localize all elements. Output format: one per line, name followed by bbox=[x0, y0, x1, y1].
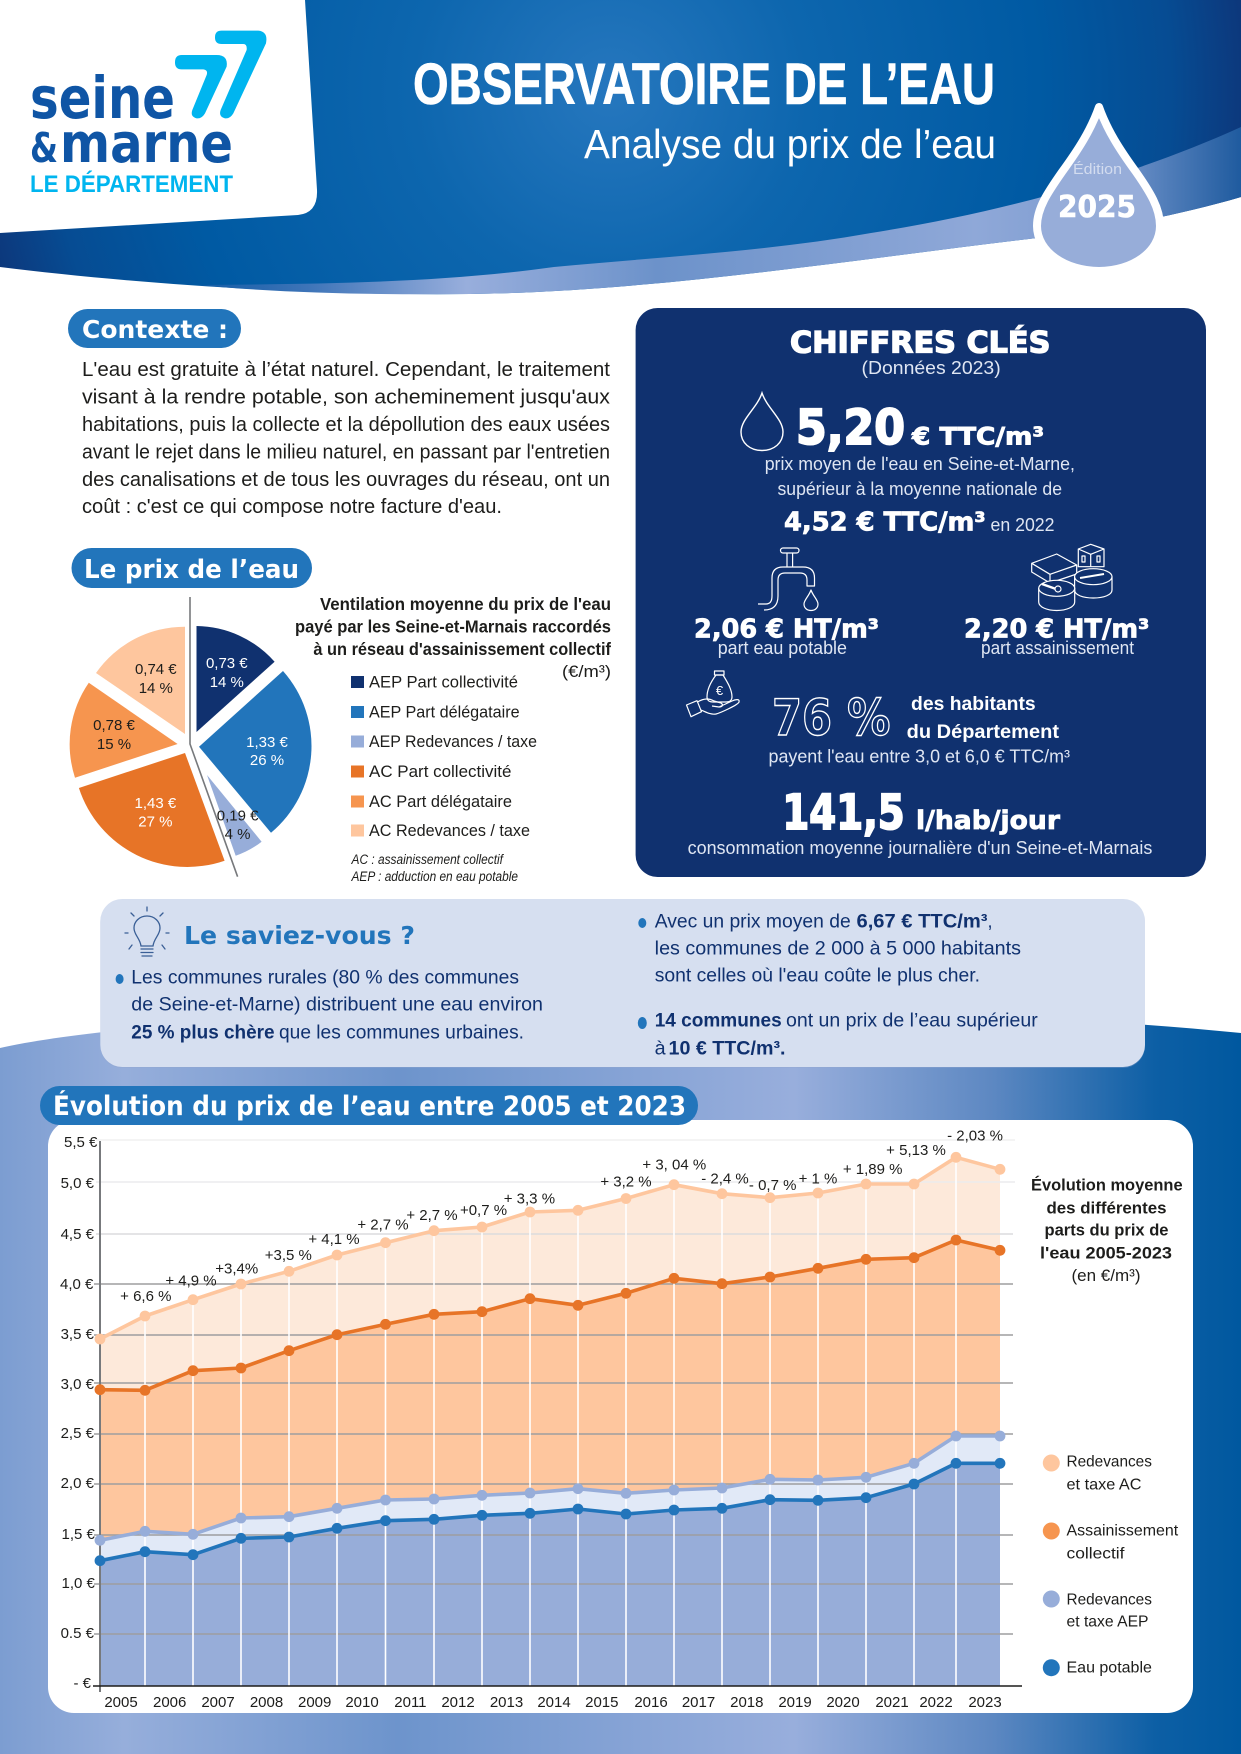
fact: communes 2000 à 5000 habitants: les communes de 2 000 à 5 000 habitants bbox=[655, 937, 1021, 959]
fact: communes 2000 à 5000 habitants: 6,67 € TTC/m³ bbox=[856, 910, 988, 932]
icon: water drop bbox=[741, 393, 783, 450]
x axis years: 2010 bbox=[345, 1694, 379, 1711]
fact: communes 2000 à 5000 habitants: sont celles où l'eau coûte le plus cher. bbox=[655, 965, 980, 987]
x axis years: 2023 bbox=[968, 1694, 1002, 1711]
stat: 76 %: 76 % bbox=[772, 689, 890, 747]
area: eau potable bbox=[100, 1463, 1000, 1686]
logo: seine: seine bbox=[30, 64, 175, 132]
y axis labels: 2,0 € bbox=[61, 1475, 95, 1492]
yearly change labels: - 2,03 % bbox=[947, 1128, 1003, 1145]
slice: AC part collectivité bbox=[79, 753, 225, 867]
yearly change labels: + 4,9 % bbox=[165, 1273, 217, 1290]
y axis labels: 2,5 € bbox=[61, 1425, 95, 1442]
icon: hand holding money bag bbox=[686, 671, 739, 717]
legend: assainissement collectif: collectif bbox=[1066, 1545, 1125, 1562]
pie chart bbox=[70, 597, 311, 877]
slice labels: 14 % bbox=[210, 674, 244, 691]
stat description bbox=[765, 454, 1075, 499]
pie note: AEP : adduction en eau potable bbox=[351, 869, 518, 884]
fact: 14 communes: 10 € TTC/m³. bbox=[668, 1037, 786, 1059]
icon: wastewater plant bbox=[1032, 544, 1112, 610]
fact: 14 communes: 14 communes bbox=[655, 1010, 782, 1032]
panel: évolution chart card bbox=[48, 1120, 1193, 1713]
stat: part eau potable: part eau potable bbox=[718, 638, 847, 658]
yearly change labels: + 3,3 % bbox=[504, 1190, 555, 1207]
yearly change labels bbox=[120, 1128, 1003, 1305]
legend: eau potable: Eau potable bbox=[1066, 1660, 1152, 1677]
pie legend: AC Part collectivité bbox=[369, 762, 511, 781]
line: eau potable bbox=[100, 1463, 1000, 1561]
text block: contexte: des canalisations et de tous les ouvrages du réseau, ont un bbox=[82, 468, 610, 491]
logo: le département: LE DÉPARTEMENT bbox=[30, 170, 233, 198]
yearly change labels: +3,4% bbox=[215, 1260, 258, 1277]
heading: le prix de l'eau: Le prix de l’eau bbox=[84, 555, 299, 585]
fact: communes rurales bbox=[116, 966, 543, 1043]
y axis labels bbox=[60, 1134, 98, 1692]
slice labels: 0,78 € bbox=[93, 717, 136, 734]
heading: évolution du prix: Évolution du prix de l’eau entre 2005 et 2023 bbox=[53, 1090, 686, 1122]
line: redevances et taxe AEP bbox=[100, 1436, 1000, 1540]
x axis years: 2006 bbox=[153, 1694, 186, 1711]
line: assainissement collectif bbox=[100, 1240, 1000, 1390]
separator line bbox=[190, 597, 238, 877]
panel: le saviez-vous bbox=[100, 899, 1145, 1068]
chart title bbox=[1031, 1176, 1183, 1285]
lower blue background bbox=[0, 1010, 1241, 1754]
stat description: consommation: consommation moyenne journalière d'un Seine-et-Marnais bbox=[688, 838, 1152, 858]
area and line chart bbox=[60, 1128, 1022, 1711]
yearly change labels: + 4,1 % bbox=[308, 1231, 360, 1248]
text block: contexte: coût : c'est ce qui compose notre facture d'eau. bbox=[82, 495, 502, 518]
slice labels: 15 % bbox=[97, 736, 131, 753]
x axis years: 2019 bbox=[778, 1694, 812, 1711]
stat unit: € TTC/m³ bbox=[911, 422, 1044, 450]
slice: AEP redevances bbox=[207, 775, 262, 856]
edition label: Édition bbox=[1073, 161, 1122, 178]
stat: 141,5: 141,5 bbox=[782, 785, 905, 841]
icon: light bulb bbox=[125, 907, 169, 956]
stat: des habitants du département bbox=[907, 693, 1060, 743]
area: redevances et taxe AC bbox=[100, 1157, 1000, 1686]
stat unit: l/hab/jour: l/hab/jour bbox=[916, 806, 1060, 836]
stat description: prix moyen de l'eau en Seine-et-Marne, bbox=[765, 454, 1075, 474]
chart title: (en €/m³) bbox=[1072, 1266, 1140, 1285]
pie title: (€/m³) bbox=[562, 662, 611, 681]
gridlines bbox=[94, 1140, 1015, 1634]
x axis years: 2012 bbox=[441, 1694, 475, 1711]
pie note bbox=[351, 852, 518, 884]
pie title: à un réseau d'assainissement collectif bbox=[313, 639, 611, 659]
slice labels: 1,43 € bbox=[135, 795, 177, 812]
slice: AC part délégataire bbox=[70, 683, 178, 778]
slice labels: 0,74 € bbox=[135, 661, 177, 678]
slice labels: 0,19 € bbox=[217, 808, 259, 825]
stat description: 76 %: payent l'eau entre 3,0 et 6,0 € TTC/m³ bbox=[768, 747, 1070, 767]
heading: contexte bbox=[68, 309, 241, 348]
slice: AEP part délégataire bbox=[199, 671, 311, 833]
x axis years: 2021 bbox=[875, 1694, 909, 1711]
yearly change labels: + 6,6 % bbox=[120, 1288, 171, 1305]
y axis labels: 3,0 € bbox=[61, 1376, 95, 1393]
slice labels: 4 % bbox=[225, 826, 251, 843]
axes bbox=[99, 1141, 101, 1692]
fact: communes 2000 à 5000 habitants: , bbox=[988, 910, 992, 932]
legend: assainissement collectif bbox=[1043, 1522, 1179, 1562]
chart title: parts du prix de bbox=[1044, 1221, 1168, 1240]
yearly change labels: - 2,4 % bbox=[701, 1170, 749, 1187]
slice labels: 27 % bbox=[138, 814, 173, 831]
pie legend: AEP Part délégataire bbox=[369, 702, 520, 722]
subheading: (Données 2023) bbox=[862, 358, 1001, 378]
chart title: Évolution moyenne bbox=[1031, 1176, 1183, 1195]
y axis labels: 1,5 € bbox=[62, 1526, 96, 1543]
text block: contexte: avant le rejet dans le milieu naturel, en passant par l'entretien bbox=[82, 440, 610, 464]
fact: communes 2000 à 5000 habitants: Avec un prix moyen de bbox=[655, 910, 851, 932]
text block: contexte: visant à la rendre potable, son acheminement jusqu'aux bbox=[82, 386, 611, 408]
line: redevances et taxe AC bbox=[100, 1157, 1000, 1339]
yearly change labels: - 0,7 % bbox=[749, 1177, 796, 1194]
slice: AC redevances bbox=[96, 627, 185, 734]
stat: part assainissement: 2,20 € HT/m³ bbox=[964, 615, 1149, 645]
yearly change labels: + 5,13 % bbox=[886, 1142, 946, 1159]
icon: tap bbox=[758, 548, 818, 610]
fact: communes rurales: que les communes urbaines. bbox=[279, 1021, 524, 1043]
logo: ampersand: & bbox=[30, 124, 58, 172]
y axis labels: 1,0 € bbox=[62, 1575, 96, 1592]
heading: contexte: Contexte : bbox=[82, 315, 228, 344]
fact: communes rurales: de Seine-et-Marne) distribuent une eau environ bbox=[131, 994, 543, 1016]
subtitle: Analyse du prix de l’eau bbox=[584, 121, 996, 167]
yearly change labels: + 3, 04 % bbox=[642, 1156, 706, 1173]
title: OBSERVATOIRE DE L’EAU bbox=[413, 52, 995, 117]
stat year: en 2022 bbox=[990, 515, 1054, 535]
area: redevances et taxe AEP bbox=[100, 1436, 1000, 1686]
x axis years: 2005 bbox=[104, 1694, 138, 1711]
x axis years: 2018 bbox=[730, 1694, 763, 1711]
chart title: des différentes bbox=[1046, 1198, 1166, 1217]
fact: communes 2000 à 5000 habitants bbox=[638, 910, 1021, 987]
legend: redevances et taxe AEP bbox=[1043, 1590, 1152, 1631]
slice labels: 26 % bbox=[250, 752, 284, 769]
vertical year lines bbox=[145, 1157, 956, 1686]
edition drop badge bbox=[1037, 107, 1160, 271]
yearly change labels: +0,7 % bbox=[460, 1202, 507, 1219]
panel: chiffres clés bbox=[636, 308, 1206, 877]
y axis labels: 4,0 € bbox=[60, 1276, 94, 1293]
x axis years: 2022 bbox=[919, 1694, 953, 1711]
text block: contexte: habitations, puis la collecte et la dépollution des eaux usées bbox=[82, 413, 610, 436]
stat: des habitants du département: des habitants bbox=[911, 693, 1036, 715]
stat: 5,20: 5,20 bbox=[796, 400, 905, 456]
pie legend: AC Redevances / taxe bbox=[369, 821, 530, 840]
slice labels: 1,33 € bbox=[246, 734, 289, 751]
fact: 14 communes: à bbox=[655, 1037, 666, 1059]
header light wave band bbox=[198, 127, 1241, 294]
chart legend bbox=[1043, 1454, 1179, 1677]
y axis labels: 0.5 € bbox=[61, 1625, 95, 1642]
x axis years: 2007 bbox=[201, 1694, 235, 1711]
yearly change labels: + 1,89 % bbox=[843, 1161, 903, 1178]
yearly change labels: + 2,7 % bbox=[357, 1216, 409, 1233]
x axis years: 2020 bbox=[826, 1694, 860, 1711]
x axis years: 2009 bbox=[298, 1694, 331, 1711]
logo: marne: marne bbox=[60, 112, 233, 175]
fact: 14 communes bbox=[638, 1010, 1038, 1059]
yearly change labels: + 1 % bbox=[799, 1170, 837, 1187]
x axis years: 2011 bbox=[394, 1694, 427, 1711]
yearly change labels: +3,5 % bbox=[265, 1247, 312, 1264]
stat: part eau potable: 2,06 € HT/m³ bbox=[694, 615, 879, 645]
slice labels: 0,73 € bbox=[206, 655, 248, 672]
pie legend: AC Part délégataire bbox=[369, 792, 512, 811]
header banner bbox=[0, 0, 1241, 294]
heading: le saviez-vous: Le saviez-vous ? bbox=[184, 921, 415, 950]
slice: AEP part collectivité bbox=[196, 626, 275, 732]
x axis years: 2008 bbox=[250, 1694, 283, 1711]
text block: contexte: L'eau est gratuite à l’état naturel. Cependant, le traitement bbox=[82, 358, 610, 381]
fact: communes rurales: Les communes rurales (80 % des communes bbox=[131, 966, 519, 988]
chart title: l'eau 2005-2023 bbox=[1040, 1243, 1172, 1262]
pie legend bbox=[351, 672, 537, 840]
edition year: 2025 bbox=[1058, 190, 1136, 225]
pie legend: AEP Part collectivité bbox=[369, 672, 518, 692]
stat: 4,52: 4,52 € TTC/m³ bbox=[784, 508, 986, 538]
y axis labels: 3,5 € bbox=[61, 1326, 95, 1343]
legend: redevances et taxe AEP: et taxe AEP bbox=[1066, 1614, 1148, 1631]
pie note: AC : assainissement collectif bbox=[351, 852, 504, 867]
y axis labels: 5,0 € bbox=[61, 1175, 95, 1192]
fact: communes rurales: 25 % plus chère bbox=[131, 1021, 275, 1043]
x axis years: 2016 bbox=[634, 1694, 668, 1711]
logo panel bbox=[0, 0, 317, 233]
stat: part assainissement bbox=[964, 615, 1149, 658]
pie title bbox=[295, 594, 611, 681]
text block: contexte bbox=[82, 358, 611, 518]
legend: redevances et taxe AC bbox=[1043, 1454, 1152, 1493]
stat description: supérieur à la moyenne nationale de bbox=[778, 479, 1062, 499]
icon: hand holding money bag: € bbox=[716, 683, 724, 698]
yearly change labels: + 2,7 % bbox=[406, 1207, 458, 1224]
yearly change labels: + 3,2 % bbox=[600, 1174, 652, 1191]
pie title: Ventilation moyenne du prix de l'eau bbox=[320, 594, 611, 614]
stat: des habitants du département: du Département bbox=[907, 721, 1060, 743]
legend: assainissement collectif: Assainissement bbox=[1066, 1523, 1179, 1540]
x axis years: 2013 bbox=[490, 1694, 523, 1711]
pie legend: AEP Redevances / taxe bbox=[369, 732, 537, 751]
stat: part assainissement: part assainissement bbox=[981, 638, 1134, 658]
heading: chiffres clés: CHIFFRES CLÉS bbox=[790, 326, 1050, 360]
y axis labels: 4,5 € bbox=[61, 1226, 95, 1243]
x axis years: 2017 bbox=[682, 1694, 715, 1711]
area: assainissement collectif bbox=[100, 1240, 1000, 1686]
fact: 14 communes: ont un prix de l’eau supérieur bbox=[786, 1010, 1038, 1032]
legend: redevances et taxe AC: et taxe AC bbox=[1066, 1476, 1142, 1493]
x axis years bbox=[104, 1694, 1002, 1711]
y axis labels: - € bbox=[74, 1675, 92, 1692]
logo: 77 mark bbox=[175, 31, 266, 118]
y axis labels: 5,5 € bbox=[64, 1134, 98, 1151]
x axis years: 2014 bbox=[537, 1694, 571, 1711]
legend: redevances et taxe AC: Redevances bbox=[1066, 1454, 1152, 1471]
stat: part eau potable bbox=[694, 615, 879, 658]
slice labels bbox=[93, 655, 289, 843]
pie title: payé par les Seine-et-Marnais raccordés bbox=[295, 616, 611, 636]
legend: redevances et taxe AEP: Redevances bbox=[1066, 1591, 1152, 1608]
slice labels: 14 % bbox=[139, 680, 173, 697]
x axis years: 2015 bbox=[585, 1694, 618, 1711]
